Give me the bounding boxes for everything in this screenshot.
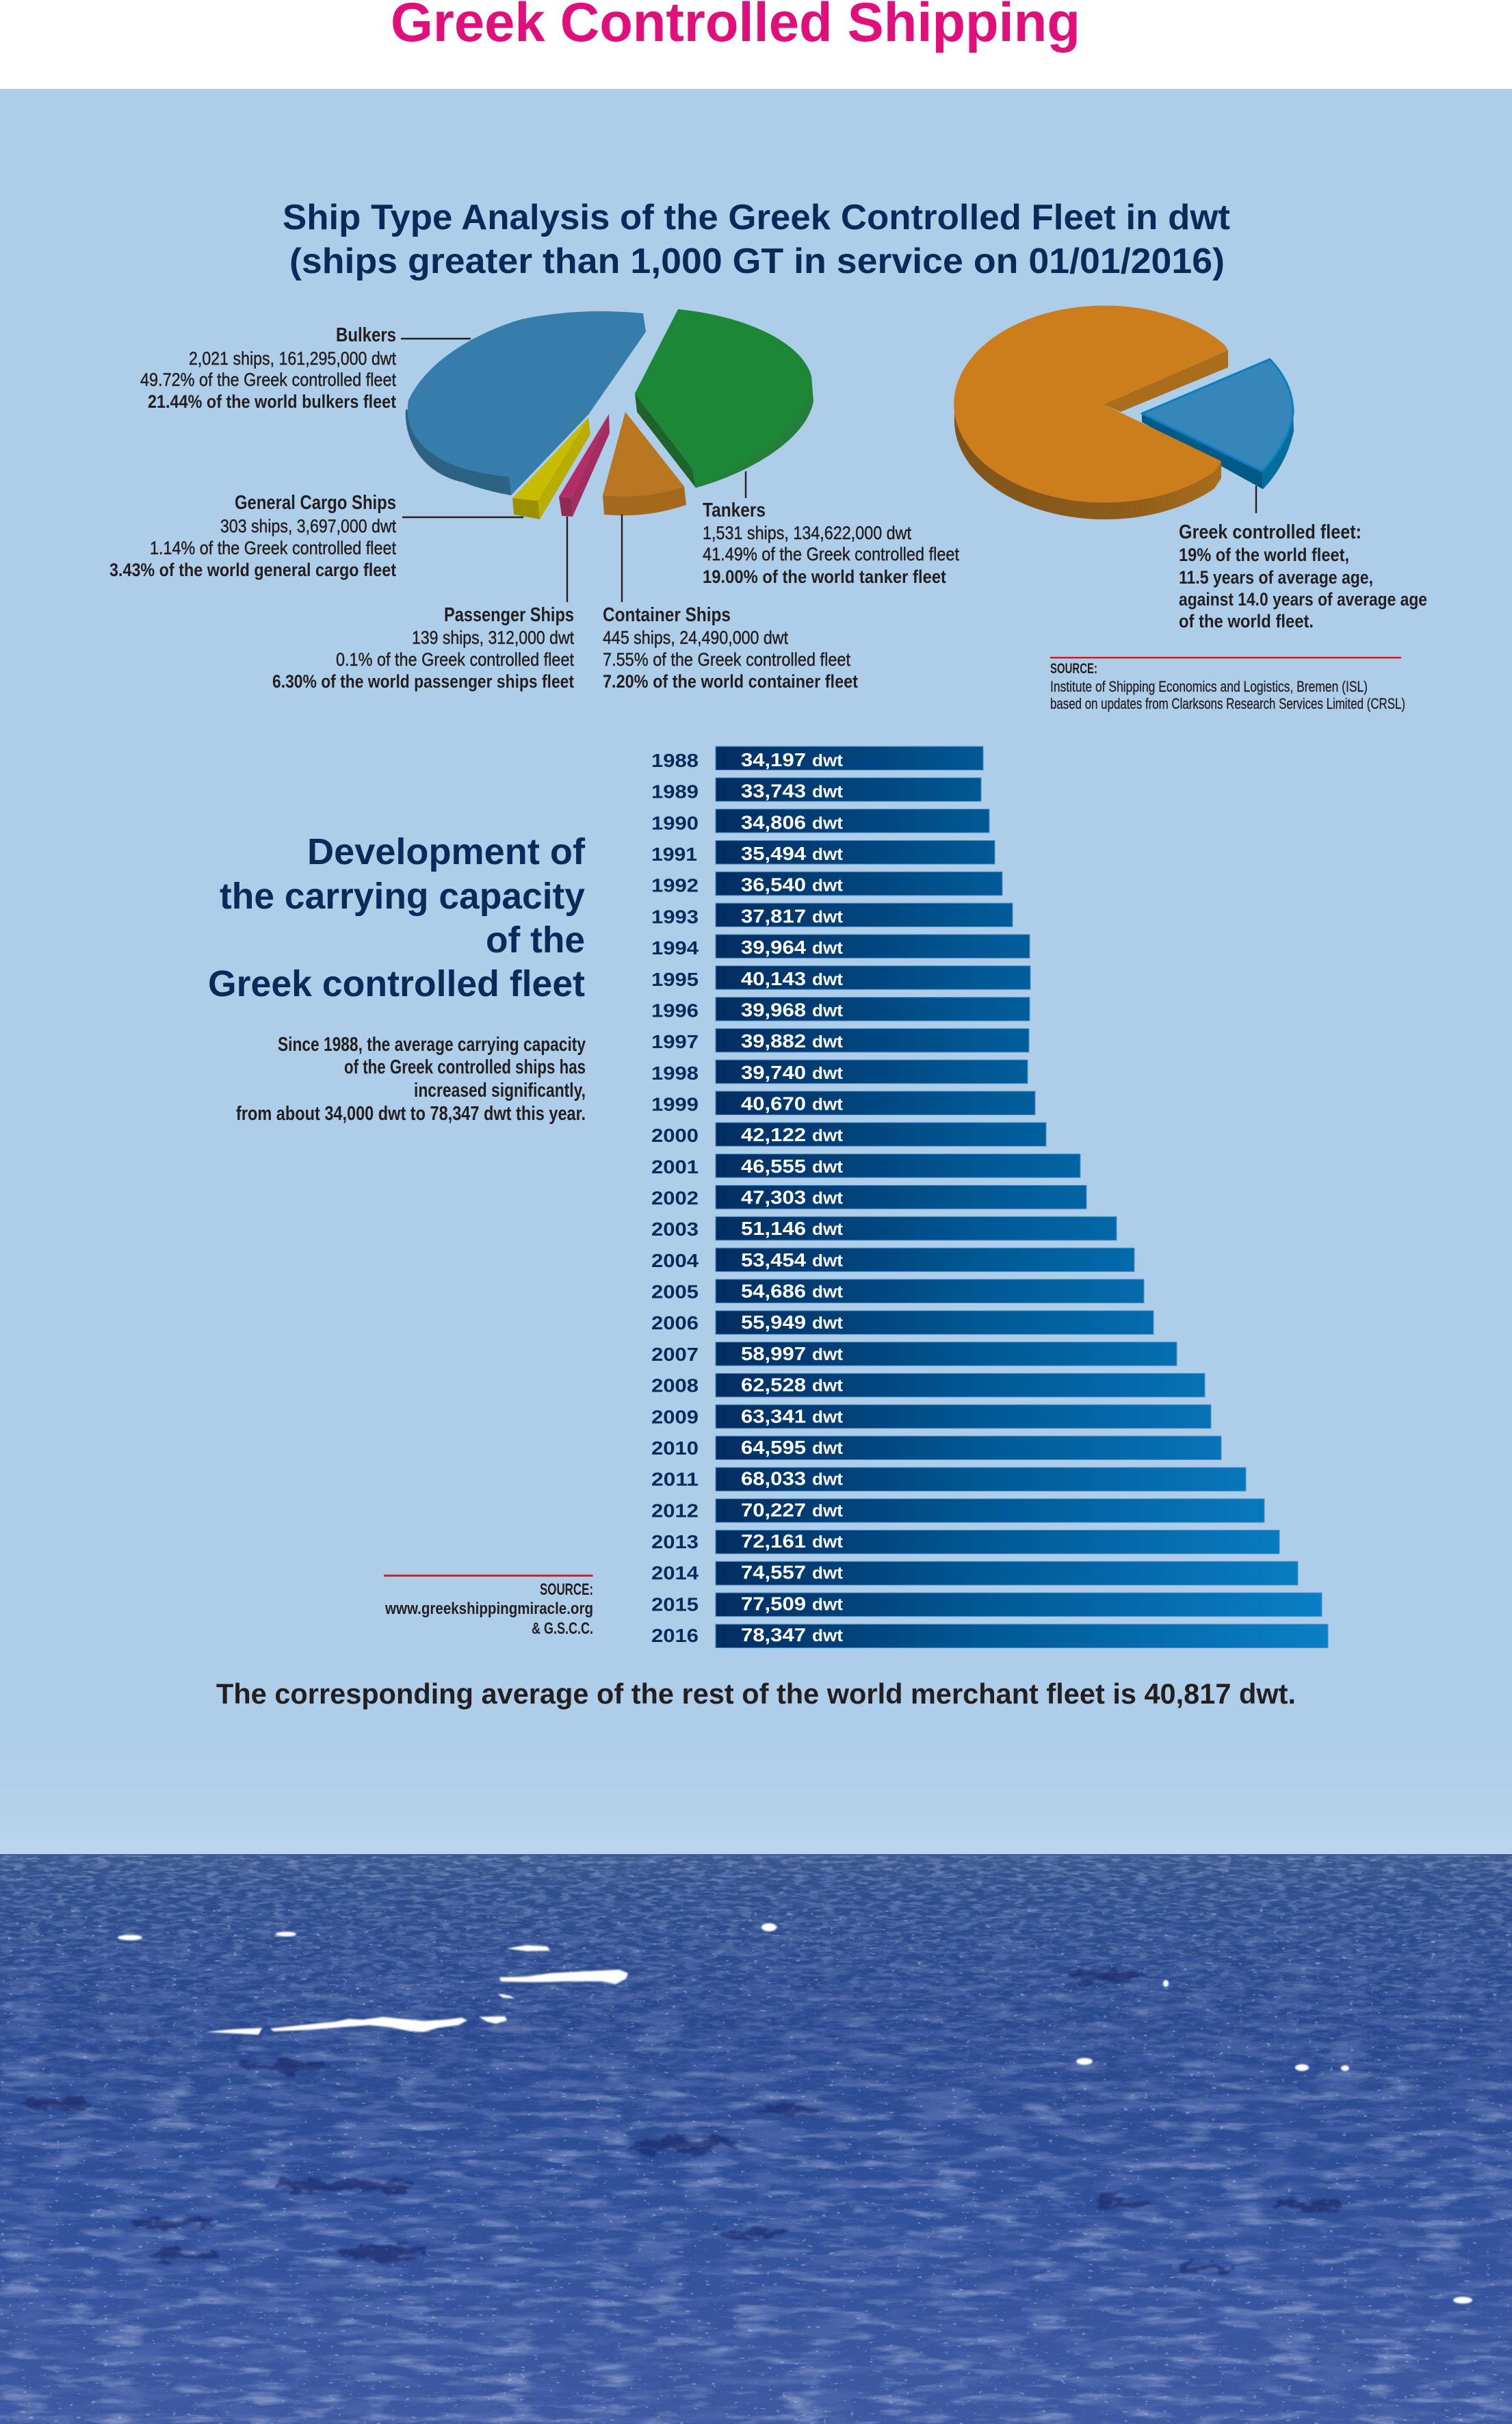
slice: rest of world fleet (954, 306, 1228, 519)
bar 1998: 39,740 (741, 1062, 806, 1083)
bar 2003 (651, 1216, 1117, 1240)
bar 2002: 47,303 (741, 1186, 806, 1208)
label: tankers: Tankers (703, 499, 766, 521)
bar 2004: 2004 (651, 1250, 699, 1271)
bar 2014: dwt (812, 1564, 844, 1583)
bar 1992: 36,540 (741, 874, 806, 896)
bar 1991 (651, 840, 995, 865)
leader line: general cargo (402, 517, 523, 518)
bar 2011: 68,033 (741, 1468, 806, 1489)
bar 2005: 2005 (651, 1281, 699, 1303)
bar 2012 (651, 1499, 1264, 1522)
bar 2013: 2013 (651, 1531, 699, 1552)
bar 2012: 70,227 (741, 1499, 806, 1520)
bar 2013 (651, 1530, 1279, 1554)
bar 1988: 1988 (651, 750, 699, 771)
bar 1991: 35,494 (741, 843, 806, 864)
label: container ships (603, 604, 858, 692)
paragraph: carrying capacity description: of the Greek controlled ships has (344, 1056, 586, 1078)
bar 1996: 1996 (651, 1000, 699, 1021)
source: ISL: based on updates from Clarksons Research Services Limited (CRSL) (1050, 695, 1405, 712)
bar 1993 (651, 903, 1013, 927)
bar 1989 (651, 778, 981, 803)
label: tankers: 1,531 ships, 134,622,000 dwt (703, 523, 911, 543)
bar 1993: dwt (812, 907, 844, 926)
bar 1996: 39,968 (741, 999, 806, 1020)
heading: development of carrying capacity: the carrying capacity (220, 876, 585, 917)
bar 2000: dwt (812, 1126, 844, 1145)
heading: development of carrying capacity: of the (486, 920, 585, 961)
label: tankers: 41.49% of the Greek controlled fleet (703, 544, 959, 564)
bar 1994: 39,964 (741, 937, 806, 958)
heading: development of carrying capacity: Development of (307, 831, 586, 872)
label: passenger ships: 6.30% of the world passenger ships fleet (272, 671, 574, 692)
heading: ship type analysis: (ships greater than 1,000 GT in service on 01/01/2016) (289, 242, 1225, 281)
source: ISL: SOURCE: (1050, 661, 1097, 677)
leader line: bulkers (401, 338, 471, 339)
bar 2000: 2000 (651, 1125, 699, 1146)
label: container ships: 7.55% of the Greek controlled fleet (603, 649, 850, 670)
bar 1994: 1994 (651, 937, 699, 959)
slice: container ships (603, 412, 686, 515)
bar 2000: 42,122 (741, 1124, 806, 1145)
bar 2011: dwt (812, 1470, 844, 1489)
bar 1997: dwt (812, 1032, 844, 1052)
source: greekshippingmiracle.org: SOURCE: (540, 1580, 593, 1599)
label: greek controlled fleet: Greek controlled fleet: (1179, 521, 1361, 543)
bar 2013: dwt (812, 1533, 844, 1552)
bar 2004: dwt (812, 1251, 844, 1270)
bar 2004 (651, 1248, 1134, 1272)
bar 2012: dwt (812, 1501, 844, 1520)
slice: greek controlled fleet (1142, 359, 1294, 489)
label: greek controlled fleet: against 14.0 years of average age (1179, 589, 1427, 610)
light blue sky background (0, 89, 1512, 1855)
bar 1998: dwt (812, 1064, 844, 1083)
label: passenger ships: 0.1% of the Greek controlled fleet (336, 649, 574, 670)
bar 2006: dwt (812, 1314, 844, 1333)
bar 2009 (651, 1405, 1211, 1429)
bar 1992: dwt (812, 876, 844, 896)
bar 1990: 34,806 (741, 811, 806, 833)
label: container ships: Container Ships (603, 604, 731, 626)
bar 1993: 37,817 (741, 905, 806, 926)
bar 2015: dwt (812, 1595, 844, 1614)
bar 1989: 33,743 (741, 781, 806, 802)
bar 1995: 40,143 (741, 968, 806, 989)
bar 2015: 77,509 (741, 1593, 806, 1614)
bar 2006: 2006 (651, 1312, 699, 1333)
label: bulkers: 2,021 ships, 161,295,000 dwt (189, 348, 396, 369)
bar 1988: dwt (812, 751, 844, 770)
bar 1995: 1995 (651, 969, 699, 990)
bar 2009: dwt (812, 1407, 844, 1426)
bar 1990 (651, 809, 989, 833)
bar 2007 (651, 1342, 1177, 1366)
label: container ships: 7.20% of the world container fleet (603, 671, 858, 692)
header band (0, 0, 1512, 89)
bar 2016: 2016 (651, 1625, 699, 1646)
bar 2006 (651, 1311, 1153, 1334)
bar 2002: 2002 (651, 1188, 699, 1208)
label: tankers (703, 499, 959, 587)
paragraph: carrying capacity description (236, 1034, 586, 1125)
bar 2008: 62,528 (741, 1374, 806, 1396)
bar 1999: 40,670 (741, 1093, 806, 1114)
bar 1996: dwt (812, 1001, 844, 1020)
label: general cargo ships: 1.14% of the Greek controlled fleet (150, 538, 396, 558)
source: greekshippingmiracle.org: & G.S.C.C. (532, 1619, 593, 1638)
bar 2016: 78,347 (741, 1624, 806, 1645)
leader line: greek controlled fleet (1255, 486, 1257, 513)
label: bulkers (140, 324, 396, 412)
footer statement: The corresponding average of the rest of the world merchant fleet is 40,817 dwt. (216, 1678, 1296, 1710)
bar 2005 (651, 1279, 1144, 1303)
bar 1998: 1998 (651, 1063, 699, 1084)
bar 1988: 34,197 (741, 749, 806, 770)
bar 1994 (651, 935, 1030, 959)
bar 2007: dwt (812, 1345, 844, 1364)
slice: passenger ships (559, 414, 610, 517)
bar 1989: dwt (812, 783, 844, 802)
bar 1995: dwt (812, 970, 844, 989)
bar 2014: 2014 (651, 1563, 699, 1584)
slice: bulkers (406, 311, 646, 495)
paragraph: carrying capacity description: Since 1988, the average carrying capacity (278, 1034, 586, 1056)
bar 2007: 58,997 (741, 1343, 806, 1364)
bar chart: average carrying capacity by year (651, 746, 1328, 1647)
bar 2007: 2007 (651, 1344, 699, 1365)
bar 2000 (651, 1123, 1046, 1146)
bar 2009: 63,341 (741, 1405, 806, 1426)
bar 1991: 1991 (651, 844, 697, 865)
bar 2006: 55,949 (741, 1312, 806, 1333)
dark wave patches (21, 1970, 1341, 2271)
paragraph: carrying capacity description: from about 34,000 dwt to 78,347 dwt this year. (236, 1103, 586, 1125)
label: bulkers: Bulkers (336, 324, 396, 346)
bar 2005: 54,686 (741, 1281, 806, 1302)
source: greekshippingmiracle.org (384, 1575, 593, 1638)
heading: ship type analysis (283, 198, 1230, 281)
label: general cargo ships: General Cargo Ships (235, 492, 396, 514)
heading: ship type analysis: Ship Type Analysis of the Greek Controlled Fleet in dwt (283, 198, 1230, 237)
bar 1992 (651, 872, 1002, 896)
leader line: container ships (621, 514, 623, 602)
bar 2009: 2009 (651, 1406, 699, 1427)
sea photograph (0, 1854, 1512, 2424)
bar 2001 (651, 1154, 1080, 1177)
leader line: tankers (745, 471, 746, 498)
white wave crests (118, 1923, 1472, 2304)
bar 2016 (651, 1624, 1328, 1647)
paragraph: carrying capacity description: increased significantly, (414, 1080, 586, 1102)
label: general cargo ships: 303 ships, 3,697,000 dwt (220, 516, 396, 536)
bar 2003: 2003 (651, 1218, 699, 1240)
bar 2001: dwt (812, 1158, 844, 1177)
label: passenger ships (272, 604, 574, 692)
bar 2010: dwt (812, 1439, 844, 1458)
label: greek controlled fleet: 19% of the world fleet, (1179, 545, 1349, 565)
bar 1997: 39,882 (741, 1030, 806, 1052)
label: greek controlled fleet: 11.5 years of average age, (1179, 567, 1373, 588)
bar 2003: dwt (812, 1220, 844, 1239)
bar 1999 (651, 1091, 1035, 1115)
pie chart: share of world fleet (954, 306, 1294, 519)
bar 2014: 74,557 (741, 1562, 806, 1583)
label: greek controlled fleet: of the world fleet. (1179, 611, 1314, 631)
bar 1990: dwt (812, 813, 844, 833)
bar 2008 (651, 1373, 1205, 1397)
bar 2012: 2012 (651, 1500, 699, 1521)
label: bulkers: 49.72% of the Greek controlled fleet (140, 369, 396, 390)
bar 1989: 1989 (651, 781, 699, 803)
bar 2010: 64,595 (741, 1437, 806, 1458)
bar 1999: 1999 (651, 1093, 699, 1115)
bar 2010 (651, 1436, 1221, 1460)
bar 1997: 1997 (651, 1031, 699, 1052)
bar 2010: 2010 (651, 1437, 699, 1459)
bar 2004: 53,454 (741, 1249, 806, 1270)
bar 2013: 72,161 (741, 1530, 806, 1552)
bar 2016: dwt (812, 1626, 844, 1645)
label: greek controlled fleet (1179, 521, 1427, 631)
bar 2014 (651, 1561, 1298, 1585)
label: container ships: 445 ships, 24,490,000 dwt (603, 627, 788, 648)
bar 1999: dwt (812, 1095, 844, 1114)
heading: development of carrying capacity: Greek controlled fleet (208, 963, 585, 1004)
bar 2001: 46,555 (741, 1156, 806, 1177)
label: general cargo ships: 3.43% of the world general cargo fleet (109, 560, 396, 580)
bar 2002 (651, 1185, 1086, 1209)
bar 2008: dwt (812, 1377, 844, 1396)
bar 2015: 2015 (651, 1593, 699, 1615)
bar 2011: 2011 (651, 1469, 699, 1490)
bar 1995 (651, 966, 1030, 990)
slice: tankers (635, 309, 813, 488)
label: passenger ships: Passenger Ships (444, 604, 574, 626)
slice: general cargo ships (512, 417, 590, 519)
bar 1990: 1990 (651, 812, 699, 833)
bar 1992: 1992 (651, 875, 699, 896)
label: passenger ships: 139 ships, 312,000 dwt (412, 627, 574, 648)
bar 1996 (651, 998, 1030, 1021)
bar 2011 (651, 1468, 1246, 1491)
pie chart: ship type breakdown (406, 309, 813, 519)
bar 2001: 2001 (651, 1156, 699, 1177)
leader line: passenger ships (566, 517, 568, 602)
bar 2015 (651, 1593, 1322, 1617)
label: general cargo ships (109, 492, 396, 580)
bar 2003: 51,146 (741, 1218, 806, 1239)
source: greekshippingmiracle.org: www.greekshippingmiracle.org (384, 1600, 593, 1618)
source: ISL (1050, 657, 1405, 712)
bar 2002: dwt (812, 1189, 844, 1208)
bar 2005: dwt (812, 1283, 844, 1302)
label: tankers: 19.00% of the world tanker fleet (703, 566, 946, 587)
bar 1994: dwt (812, 939, 844, 958)
source: ISL: Institute of Shipping Economics and Logistics, Bremen (ISL) (1050, 678, 1368, 695)
bar 1991: dwt (812, 845, 844, 864)
bar 1988 (651, 746, 983, 771)
heading: development of carrying capacity (208, 831, 586, 1004)
label: bulkers: 21.44% of the world bulkers fleet (148, 391, 396, 412)
bar 1998 (651, 1060, 1028, 1084)
bar 2008: 2008 (651, 1375, 699, 1396)
bar 1993: 1993 (651, 906, 699, 927)
bar 1997 (651, 1028, 1029, 1052)
